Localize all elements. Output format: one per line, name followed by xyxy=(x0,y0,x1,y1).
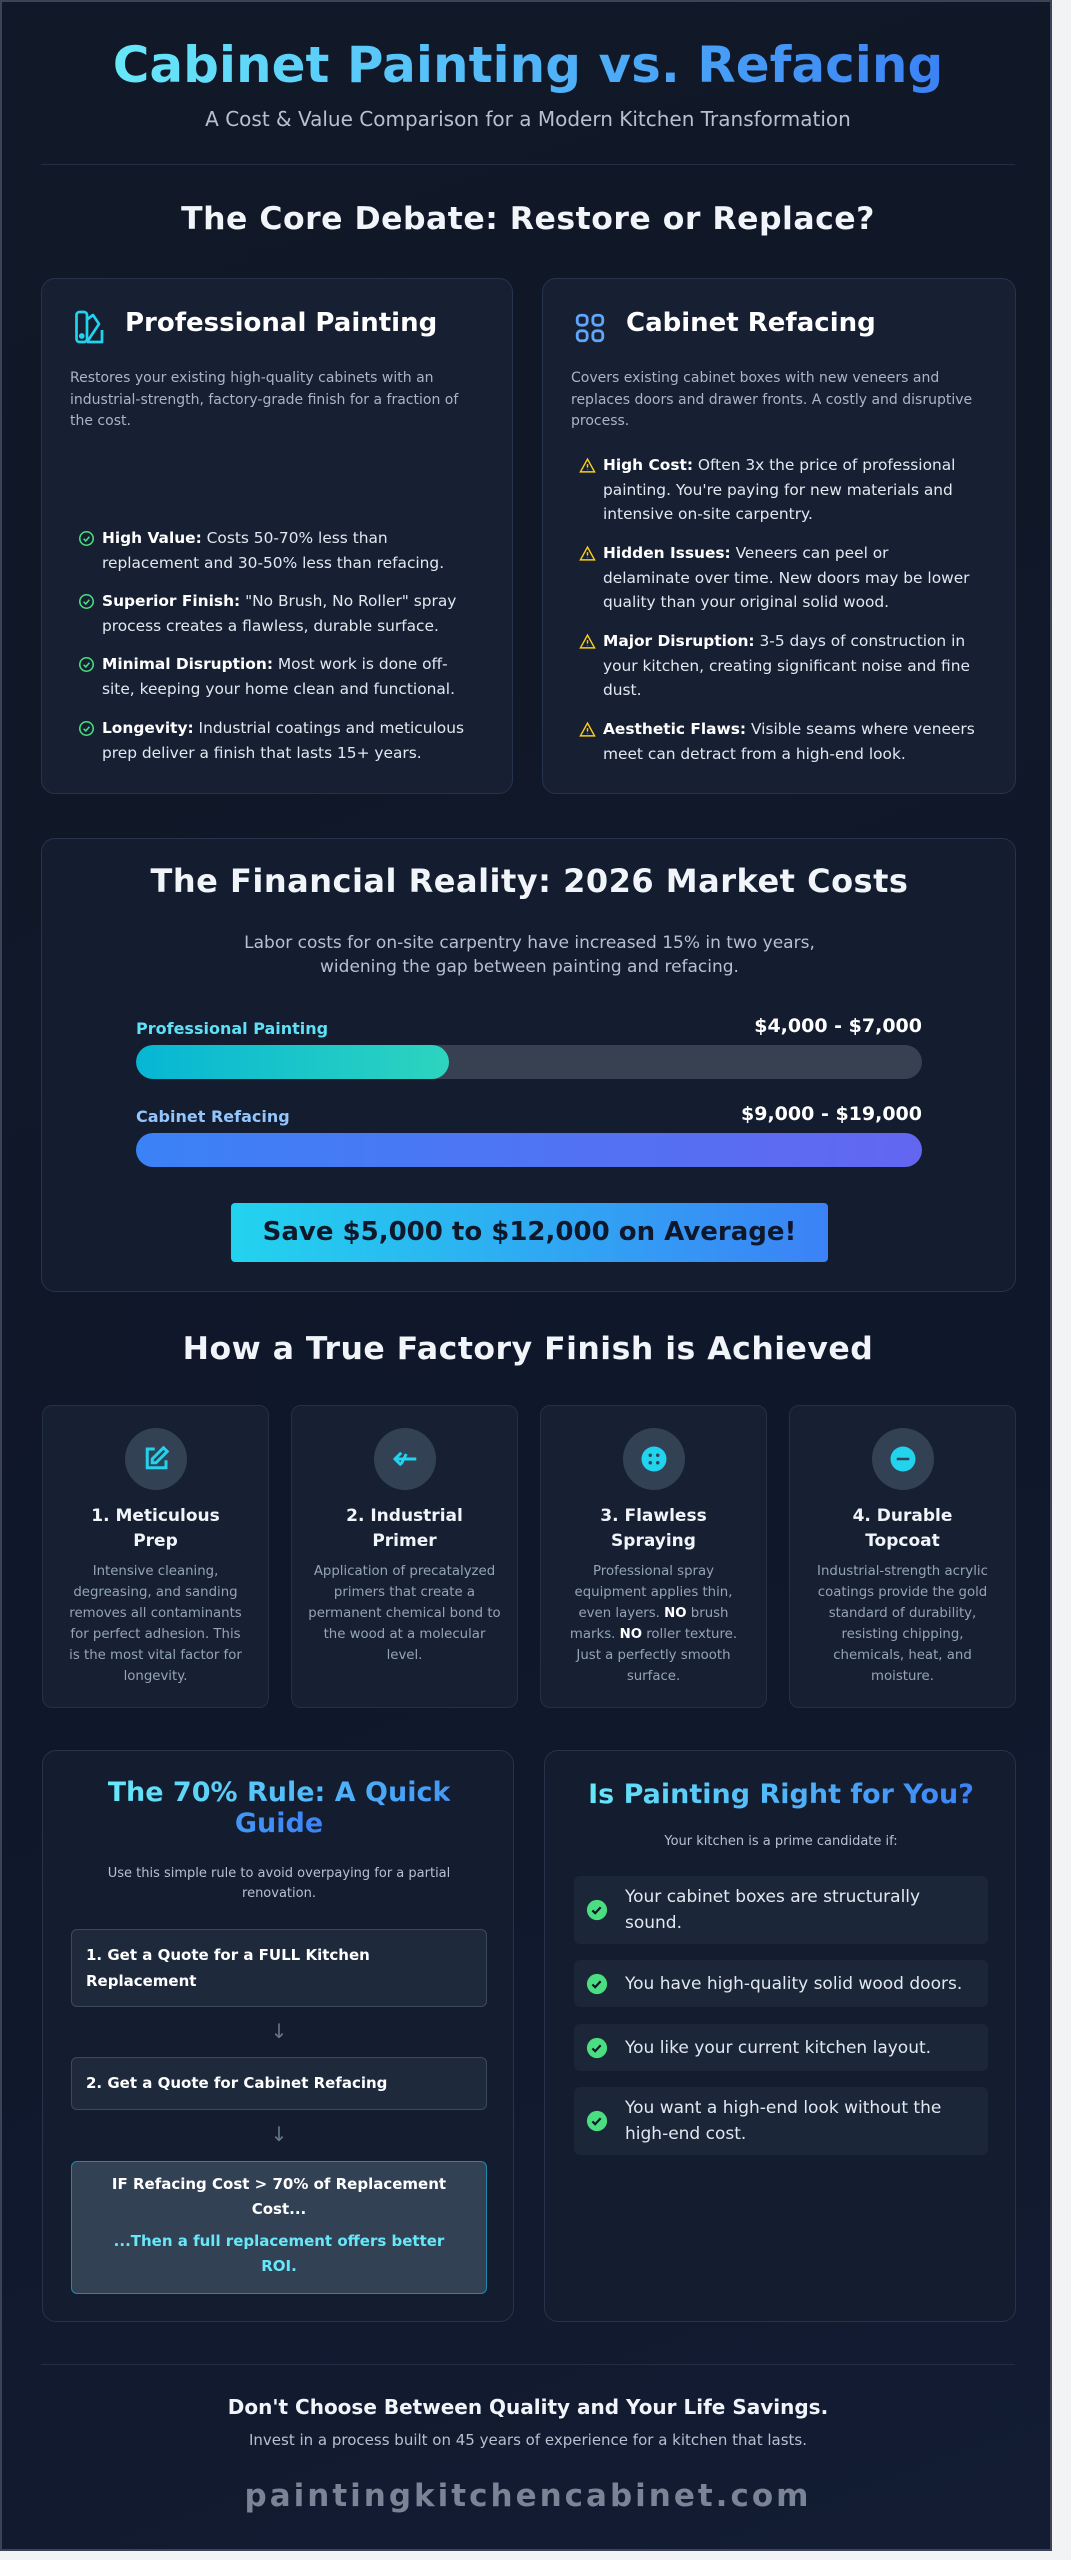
description: Restores your existing high-quality cabinets with an industrial-strength, factory-grade finish for a fraction of the cost. xyxy=(70,370,458,429)
step 3: Spraying xyxy=(611,1531,696,1551)
benefits list xyxy=(79,529,464,762)
panel: is painting right xyxy=(544,1750,1016,2322)
bar chart: Professional Painting xyxy=(136,1019,328,1038)
drawbacks list: Hidden Issues: Veneers can peel or delaminate over time. New doors may be lower quality than your original solid wood. xyxy=(603,544,970,611)
step 4: 4. Durable xyxy=(853,1506,952,1526)
drawbacks list xyxy=(579,456,975,763)
icon: spray xyxy=(623,1428,685,1490)
icon: paint swatch xyxy=(75,310,104,344)
step 3 xyxy=(540,1405,767,1708)
bar chart: $4,000 - $7,000 xyxy=(754,1015,922,1037)
heading: Cabinet Refacing xyxy=(626,308,876,338)
heading: The 70% Rule: A Quick Guide xyxy=(108,1777,450,1839)
benefits list: High Value: Costs 50-70% less than replacement and 30-50% less than refacing. xyxy=(102,529,444,572)
callout: savings: Save $5,000 to $12,000 on Average! xyxy=(263,1217,796,1247)
description: Covers existing cabinet boxes with new veneers and replaces doors and drawer fronts. A costly and disruptive process. xyxy=(571,370,972,429)
checklist item 1 xyxy=(574,1876,988,1944)
step 2: Application of precatalyzed primers that create a permanent chemical bond to the wood at a molecular level. xyxy=(308,1564,501,1663)
checklist item 3 xyxy=(574,2024,988,2071)
step 1 xyxy=(42,1405,269,1708)
footer heading: Don't Choose Between Quality and Your Life Savings. xyxy=(228,2395,828,2419)
checklist item 4: You want a high-end look without the high-end cost. xyxy=(625,2098,941,2144)
step box 2: 2. Get a Quote for Cabinet Refacing xyxy=(86,2074,387,2092)
step 4 xyxy=(789,1405,1016,1708)
heading: core debate: The Core Debate: Restore or Replace? xyxy=(181,201,875,237)
bar chart: Cabinet Refacing xyxy=(136,1107,290,1126)
subtitle: A Cost & Value Comparison for a Modern Kitchen Transformation xyxy=(205,107,851,131)
panel: financial reality xyxy=(41,838,1016,1292)
icon: grid xyxy=(576,314,604,342)
icon: primer arrows xyxy=(374,1428,436,1490)
panel: 70% rule xyxy=(42,1750,514,2322)
step 1: 1. Meticulous xyxy=(91,1506,220,1526)
intro: Your kitchen is a prime candidate if: xyxy=(664,1834,898,1849)
intro text xyxy=(244,933,815,977)
arrow: ↓ xyxy=(271,2122,287,2146)
title: Cabinet Painting vs. Refacing xyxy=(113,36,943,94)
heading: Is Painting Right for You? xyxy=(588,1779,974,1810)
step 2: Primer xyxy=(372,1531,437,1551)
heading: The Financial Reality: 2026 Market Costs xyxy=(151,862,908,900)
step 4: Topcoat xyxy=(865,1531,940,1551)
heading: Professional Painting xyxy=(125,308,437,338)
callout: savings xyxy=(231,1203,828,1262)
checklist item 2: You have high-quality solid wood doors. xyxy=(625,1974,962,1994)
step 3: 3. Flawless xyxy=(600,1506,707,1526)
step box 1 xyxy=(71,1929,487,2007)
step 3: Professional spray equipment applies thin, even layers. NO brush marks. NO roller texture. Just a perfectly smooth surface. xyxy=(570,1564,737,1684)
checklist item 3: You like your current kitchen layout. xyxy=(625,2038,931,2058)
step 2: 2. Industrial xyxy=(346,1506,463,1526)
intro text: widening the gap between painting and refacing. xyxy=(320,957,739,977)
result box: IF Refacing Cost > 70% of Replacement Cost... xyxy=(112,2175,446,2218)
intro: Use this simple rule to avoid overpaying for a partial renovation. xyxy=(108,1866,450,1901)
result box: ...Then a full replacement offers better ROI. xyxy=(114,2232,444,2275)
panel: professional painting xyxy=(41,278,513,794)
benefits list: Minimal Disruption: Most work is done off-site, keeping your home clean and functional. xyxy=(102,655,455,698)
step box 1: 1. Get a Quote for a FULL Kitchen Replacement xyxy=(86,1946,370,1990)
drawbacks list: High Cost: Often 3x the price of professional painting. You're paying for new materials and intensive on-site carpentry. xyxy=(603,456,955,523)
arrow: ↓ xyxy=(271,2019,287,2043)
benefits list: Superior Finish: "No Brush, No Roller" spray process creates a flawless, durable surface. xyxy=(102,592,456,635)
step 4: Industrial-strength acrylic coatings provide the gold standard of durability, resisting chipping, chemicals, heat, and moisture. xyxy=(817,1564,988,1684)
bar chart xyxy=(136,1015,922,1167)
step 1: Intensive cleaning, degreasing, and sanding removes all contaminants for perfect adhesion. This is the most vital factor for longevity. xyxy=(69,1564,242,1684)
panel: cabinet refacing xyxy=(542,278,1016,794)
checklist item 2 xyxy=(574,1960,988,2007)
footer text: Invest in a process built on 45 years of experience for a kitchen that lasts. xyxy=(249,2431,807,2449)
step 2 xyxy=(291,1405,518,1708)
heading: factory finish: How a True Factory Finish is Achieved xyxy=(183,1331,873,1367)
bar chart: $9,000 - $19,000 xyxy=(741,1103,922,1125)
icon: edit xyxy=(125,1428,187,1490)
icon: shield topcoat xyxy=(872,1428,934,1490)
step box 2 xyxy=(71,2057,487,2110)
checklist item 4 xyxy=(574,2087,988,2155)
drawbacks list: Major Disruption: 3-5 days of construction in your kitchen, creating significant noise and fine dust. xyxy=(603,632,970,699)
result box xyxy=(71,2161,487,2294)
website: paintingkitchencabinet.com xyxy=(245,2478,811,2514)
benefits list: Longevity: Industrial coatings and meticulous prep deliver a finish that lasts 15+ years. xyxy=(102,719,464,762)
checklist item 1: Your cabinet boxes are structurally sound. xyxy=(625,1887,920,1933)
intro text: Labor costs for on-site carpentry have increased 15% in two years, xyxy=(244,933,815,953)
step 1: Prep xyxy=(133,1531,178,1551)
drawbacks list: Aesthetic Flaws: Visible seams where veneers meet can detract from a high-end look. xyxy=(603,720,975,763)
